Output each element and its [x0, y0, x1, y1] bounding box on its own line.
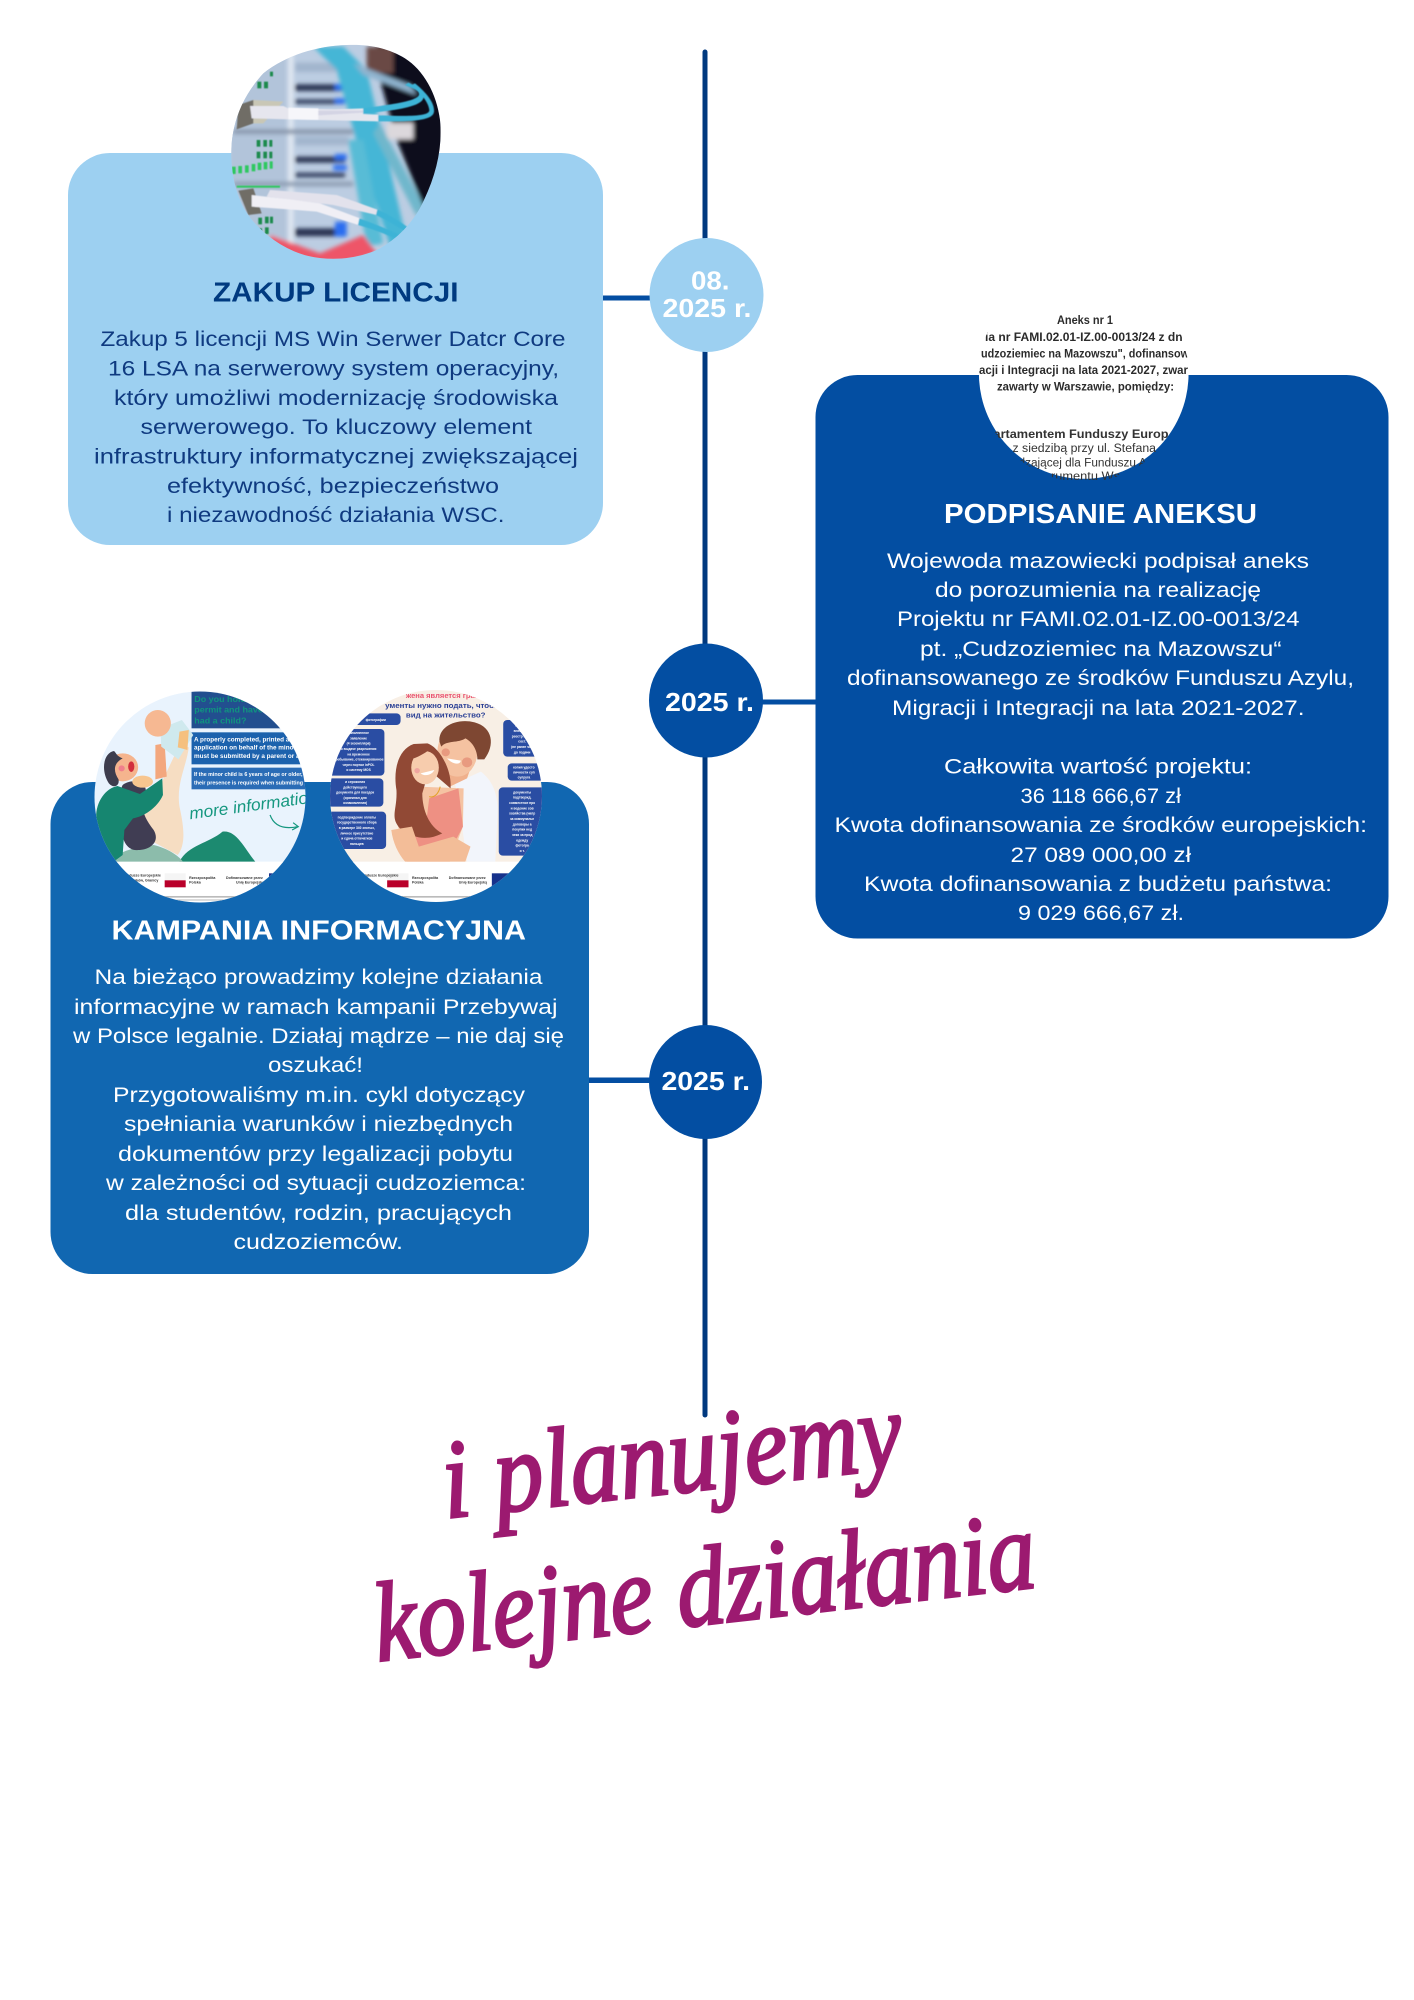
node: 2025 r. (aneks): [649, 644, 763, 758]
body text: dla studentów, rodzin, pracujących: [125, 1202, 512, 1225]
photo: family campaign poster: permit and have: [194, 705, 263, 715]
heading: PODPISANIE ANEKSU: [944, 498, 1257, 529]
photo: couple campaign poster: Rzeczpospolita: [412, 876, 438, 880]
photo: family campaign poster: dla Szlaków, Granicy: [123, 878, 158, 882]
woman face: [411, 751, 439, 784]
body text: 9 029 666,67 zł.: [1018, 902, 1184, 925]
photo: couple campaign poster: жена является граж: [405, 691, 481, 700]
photo: family campaign poster: more information: [188, 787, 319, 823]
woman hair: [120, 781, 156, 850]
photo: couple campaign poster: (4 экземпляра): [347, 742, 370, 746]
photo: couple campaign poster: подтверждение оплаты: [338, 815, 376, 819]
photo: family campaign poster: Dofinansowane przez: [226, 876, 263, 880]
body text: spełniania warunków i niezbędnych: [124, 1113, 513, 1136]
body text: [72, 966, 564, 1254]
photo: couple campaign poster: и серокопия: [345, 780, 365, 784]
node: 2025 r. (kampania): [649, 1025, 762, 1139]
woman body: [398, 787, 464, 862]
man shirt: [455, 772, 498, 862]
photo: couple campaign poster: Dofinansowane przez: [449, 876, 486, 880]
photo: couple campaign poster: до подачи: [514, 750, 530, 754]
photo: couple campaign poster: [330, 690, 542, 902]
baby head: [145, 710, 171, 737]
photo: aneks document: ia nr FAMI.02.01-IZ.00-0013/24 z dni: [985, 332, 1186, 344]
photo: family campaign poster: had a child?: [194, 715, 246, 725]
body text: do porozumienia na realizację: [935, 579, 1261, 602]
photo: couple campaign poster: внесённая: [514, 729, 531, 733]
card background: [50, 782, 589, 1274]
man neck: [449, 772, 470, 786]
photo: couple campaign poster: и т.: [520, 849, 525, 853]
photo: family campaign poster: If the minor child is 6 years of age or older,: [194, 772, 303, 778]
photo: couple campaign poster: о выдаче разрешения: [341, 747, 377, 751]
photo: aneks document: udzoziemiec na Mazowszu", dofinansow: [981, 348, 1189, 360]
body text: Kwota dofinansowania z budżetu państwa:: [864, 873, 1332, 896]
node: 08.2025 r.: [650, 238, 764, 352]
photo: family campaign poster: Unię Europejską: [236, 881, 264, 885]
body text: efektywność, bezpieczeństwo: [167, 475, 499, 498]
card background: [68, 153, 603, 545]
mother body: [144, 747, 189, 855]
connector: card to 08.2025 node: [603, 296, 653, 300]
body text: i niezawodność działania WSC.: [167, 504, 504, 527]
photo: family campaign poster: [94, 692, 306, 902]
photo: aneks document: artamentem Funduszy Europ: [994, 429, 1168, 441]
body text: Projektu nr FAMI.02.01-IZ.00-0013/24: [897, 608, 1300, 631]
body text: 36 118 666,67 zł: [1020, 785, 1181, 808]
photo: couple campaign poster: хозяйства (напр: [509, 812, 535, 816]
photo: family campaign poster: Fundusze Europejskie: [123, 874, 161, 878]
panel: zakup licencji: [68, 40, 653, 545]
photo: family campaign poster: Rzeczpospolita: [189, 876, 215, 880]
body text: dofinansowanego ze środków Funduszu Azylu,: [847, 667, 1354, 690]
body text: w Polsce legalnie. Działaj mądrze – nie daj się: [72, 1025, 564, 1048]
panel: podpisanie aneksu: [705, 315, 1388, 938]
photo: couple campaign poster: Unię Europejską: [459, 881, 487, 885]
photo: couple campaign poster: документы: [513, 790, 531, 794]
photo: couple campaign poster: выписка: [515, 724, 529, 728]
photo: couple campaign poster: фотографии: [366, 718, 386, 722]
photo: couple campaign poster: вид на жительство?: [406, 710, 486, 719]
photo: couple campaign poster: подтвержд.: [513, 796, 532, 800]
seated legs: [179, 832, 255, 862]
body text: Całkowita wartość projektu:: [944, 756, 1252, 778]
photo: couple campaign poster: супруга: [518, 776, 530, 780]
timeline axis: [702, 52, 708, 1415]
body text: Przygotowaliśmy m.in. cykl dotyczący: [113, 1084, 526, 1107]
node: 08.2025 r.: 08.: [691, 266, 730, 296]
body text: serwerowego. To kluczowy element: [140, 416, 532, 439]
photo: couple campaign poster: за коммунальн: [510, 817, 534, 821]
photo: couple campaign poster: чеки за прод: [512, 833, 532, 837]
connector: card to node: [589, 1078, 651, 1083]
photo: couple campaign poster: через портал inPOL: [343, 763, 375, 767]
photo: couple campaign poster: ументы нужно подать, чтобы: [385, 701, 501, 710]
photo: aneks document: z siedzibą przy ul. Stefana: [1012, 443, 1157, 455]
body text: Migracji i Integracji na lata 2021-2027.: [892, 697, 1304, 720]
body text: 16 LSA na serwerowy system operacyjny,: [108, 358, 559, 380]
closing slogan: i planujemy: [435, 1368, 909, 1543]
photo: aneks document: rumentu Ws: [1051, 471, 1120, 483]
node: 08.2025 r.: 2025 r.: [662, 293, 752, 323]
woman hair: [395, 743, 451, 838]
photo: couple campaign poster: заявление: [350, 736, 367, 740]
body text: pt. „Cudzoziemiec na Mazowszu“: [920, 638, 1282, 661]
body text: [94, 328, 578, 527]
photo: couple campaign poster: совместное про: [509, 801, 535, 805]
arms: [391, 827, 471, 862]
logos: [165, 873, 186, 880]
photo: aneks document: [979, 315, 1189, 483]
heading: ZAKUP LICENCJI: [213, 276, 458, 308]
photo: aneks document: acji i Integracji na lata 2021-2027, zwar: [979, 365, 1189, 377]
photo: aneks document: zawarty w Warszawie, pomiędzy:: [997, 382, 1174, 394]
node: 2025 r. (aneks): 2025 r.: [665, 687, 754, 717]
photo: couple campaign poster: в размере 340 злотых,: [339, 826, 375, 830]
photo: family campaign poster: Polska: [189, 881, 201, 885]
photo: couple campaign poster: пребывание, отсканированное: [334, 758, 384, 762]
body text: cudzoziemców.: [234, 1231, 403, 1254]
photo: couple campaign poster: пальцев: [350, 842, 364, 846]
baby body: [161, 720, 193, 759]
photo: couple campaign poster: покупки нед: [512, 828, 532, 832]
body text: Wojewoda mazowiecki podpisał aneks: [887, 550, 1309, 573]
closing slogan: [367, 1368, 1042, 1686]
photo: couple campaign poster: Polska: [412, 881, 424, 885]
body text: oszukać!: [268, 1054, 363, 1077]
node: 2025 r. (kampania): 2025 r.: [662, 1066, 750, 1096]
body text: dokumentów przy legalizacji pobytu: [118, 1143, 513, 1166]
photo: couple campaign poster: личности суп: [513, 770, 535, 774]
man face: [438, 738, 477, 776]
photo: couple campaign poster: и сдача отпечатков: [341, 837, 372, 841]
photo: couple campaign poster: одежду: [516, 838, 528, 842]
photo: couple campaign poster: (не ранее чем: [511, 745, 534, 749]
photo: couple campaign poster: реестр актов: [512, 734, 533, 738]
body text: Na bieżąco prowadzimy kolejne działania: [94, 966, 543, 989]
card background: [816, 375, 1388, 938]
heading: KAMPANIA INFORMACYJNA: [112, 914, 526, 946]
photo: family campaign poster: A properly completed, printed and: [194, 736, 297, 743]
photo: couple campaign poster: ознакомления): [343, 801, 367, 805]
photo: couple campaign poster: заполненное: [348, 731, 369, 735]
photo: couple campaign poster: (оригинал для: [344, 796, 367, 800]
connector: node to card: [705, 700, 817, 704]
body text: informacyjne w ramach kampanii Przebywaj: [74, 996, 558, 1019]
father head: [114, 753, 138, 782]
panel: kampania informacyjna: [50, 683, 651, 1274]
body text: Kwota dofinansowania ze środków europejskich:: [834, 814, 1367, 837]
body text: [834, 550, 1367, 925]
father jacket: [96, 778, 163, 863]
photo: couple campaign poster: фотогра: [515, 844, 529, 848]
body text: 27 089 000,00 zł: [1010, 844, 1191, 867]
body text: Zakup 5 licencji MS Win Serwer Datcr Core: [100, 328, 566, 351]
logos: [387, 873, 409, 880]
photo: couple campaign poster: и систему MOS: [346, 768, 372, 772]
photo: couple campaign poster: личное присутствие: [340, 831, 374, 835]
photo: couple campaign poster: сост.: [518, 740, 526, 744]
photo: couple campaign poster: Fundusze Europejskie: [360, 874, 399, 878]
body text: infrastruktury informatycznej zwiększającej: [94, 446, 578, 468]
photo: family campaign poster: application on behalf of the minor: [194, 745, 297, 752]
photo: family campaign poster: must be submitted by a parent or a: [194, 753, 300, 760]
body text: który umożliwi modernizację środowiska: [114, 387, 558, 410]
closing slogan: kolejne działania: [367, 1488, 1042, 1686]
photo: couple campaign poster: государственного сбора: [337, 821, 377, 825]
body text: w zależności od sytuacji cudzoziemca:: [105, 1172, 526, 1195]
raised arm: [155, 743, 167, 779]
photo: couple campaign poster: документа для поездок: [336, 791, 375, 795]
photo: family campaign poster: their presence is required when submitting: [194, 780, 303, 786]
photo: aneks document: Aneks nr 1: [1057, 315, 1114, 327]
photo: aneks document: dzającej dla Funduszu A: [1018, 458, 1147, 470]
photo: couple campaign poster: договоры а: [513, 822, 532, 826]
photo: couple campaign poster: и ведение сов: [511, 806, 534, 810]
photo: family campaign poster: Do you hold a: [194, 694, 253, 704]
photo: couple campaign poster: копия удосто: [513, 766, 535, 770]
photo: server cables: [231, 44, 441, 259]
photo: couple campaign poster: действующего: [343, 785, 367, 789]
photo: couple campaign poster: на временное: [347, 752, 370, 756]
